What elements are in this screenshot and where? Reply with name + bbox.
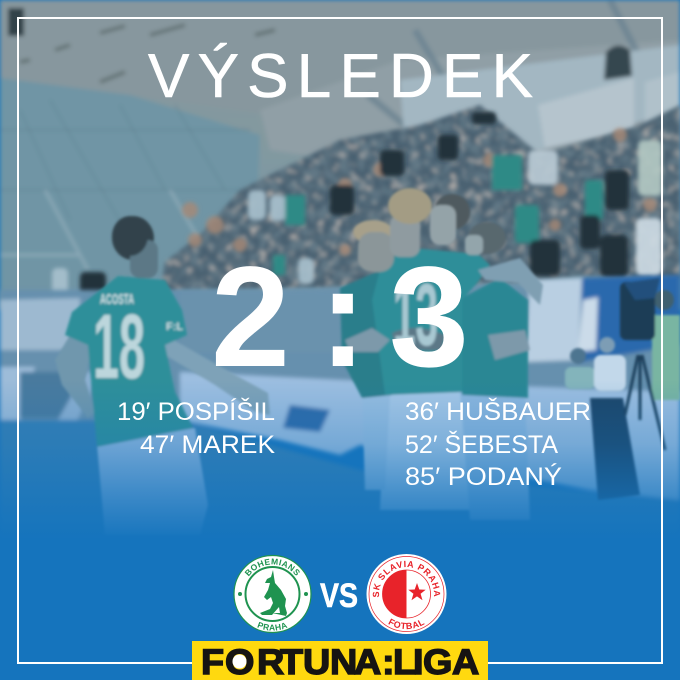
home goal scorers (117, 397, 275, 459)
title: VÝSLEDEK (148, 42, 533, 111)
home goal scorers: 19′ POSPÍŠIL (117, 397, 275, 426)
player 18 (left): ACOSTA (100, 291, 134, 308)
away goal scorers: 52′ ŠEBESTA (405, 430, 558, 459)
player 18 (left) (55, 216, 270, 535)
bystanders and camera (565, 278, 680, 500)
player 18 (left): F:L (166, 321, 183, 333)
celebrating players (centre) (340, 188, 543, 520)
colon: : (319, 238, 367, 397)
crowd (160, 105, 680, 295)
away goal scorers: 85′ PODANÝ (405, 462, 562, 491)
logo: Bohemians Praha (233, 554, 312, 634)
icon: kangaroo (260, 570, 287, 616)
logo: Bohemians Praha: BOHEMIANS (244, 558, 300, 576)
logo: SK Slavia Praha: SK SLAVIA PRAHA (372, 560, 440, 598)
upper wall (400, 45, 680, 150)
icon: red star (408, 583, 426, 600)
advertising boards (0, 275, 680, 540)
VS label: VS (320, 577, 358, 615)
logo: SK Slavia Praha: FOTBAL (388, 618, 425, 630)
stadium ceiling and glass roof (0, 0, 680, 310)
home goal scorers: 47′ MAREK (140, 431, 275, 459)
away goal scorers (405, 397, 591, 491)
celebrating players (centre): 13 (393, 265, 438, 364)
away score: 3 (389, 238, 469, 397)
home score: 2 (211, 238, 290, 397)
logo: SK Slavia Praha (366, 554, 446, 634)
logo: Bohemians Praha: PRAHA (257, 622, 288, 630)
score (211, 238, 469, 397)
away goal scorers: 36′ HUŠBAUER (405, 397, 591, 426)
bottom fade to blue (0, 380, 680, 540)
player 18 (left): 18 (93, 296, 145, 398)
